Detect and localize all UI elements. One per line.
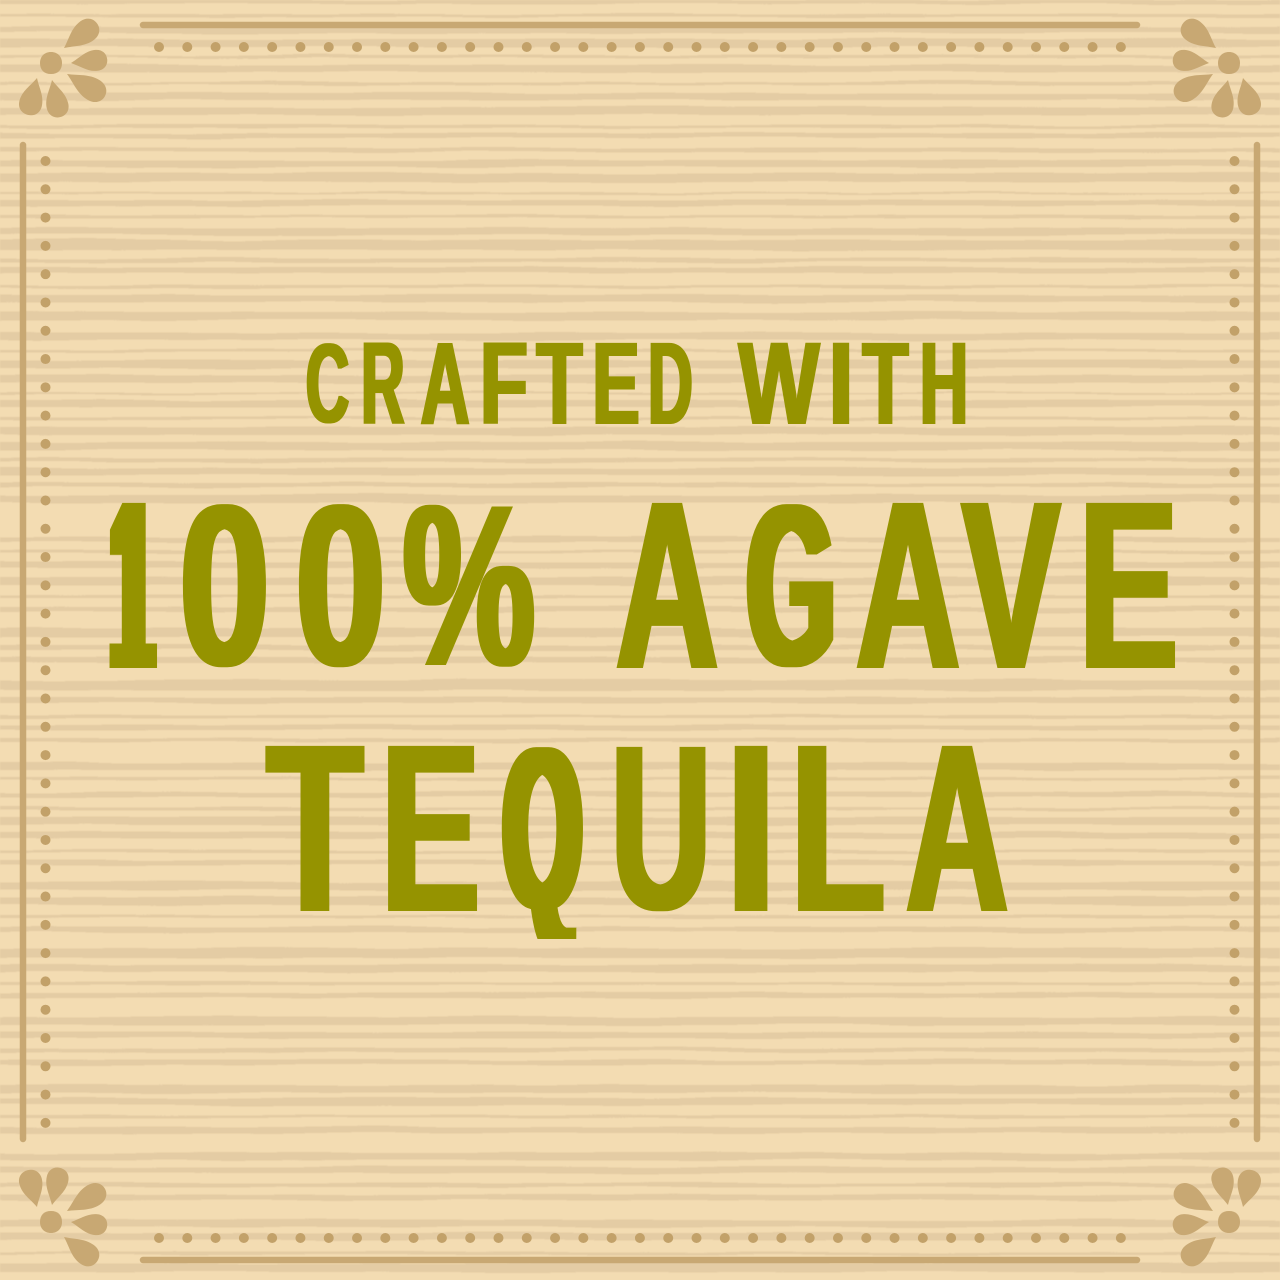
heading line: 100% AGAVE: A [856,451,960,719]
heading line: TEQUILA: T [267,695,363,963]
border: bottom bar [143,1257,1137,1263]
heading line: CRAFTED WITH: C [306,321,349,447]
heading line: TEQUILA: L [791,694,885,962]
border: bottom dotted row [159,1233,1122,1243]
border: left dotted column [40,161,50,1124]
heading line: 100% AGAVE [112,451,1178,720]
heading line: CRAFTED WITH: F [480,318,528,450]
border: left bar [20,145,26,1139]
heading line: 100% AGAVE: E [1079,452,1178,720]
heading line: CRAFTED WITH: W [738,318,820,449]
heading line: CRAFTED WITH: A [420,319,470,450]
heading line: CRAFTED WITH: T [862,317,909,449]
heading line: CRAFTED WITH: T [536,317,583,449]
heading line: TEQUILA: Q [504,699,581,957]
icon: bottom-right corner flower [1169,1166,1263,1271]
icon: top-left corner flower [17,14,111,119]
heading line: CRAFTED WITH: R [361,317,405,449]
heading line: TEQUILA [265,746,1008,939]
heading line: TEQUILA: U [611,695,711,959]
heading line: CRAFTED WITH: D [648,318,693,449]
heading line: TEQUILA: E [381,695,480,963]
heading line: CRAFTED WITH: H [920,318,968,450]
heading line: 100% AGAVE: V [962,452,1060,720]
heading line: 100% AGAVE: A [616,451,718,719]
heading line: 100% AGAVE: 0 [296,458,386,715]
heading line: TEQUILA: A [906,694,1008,962]
border: right dotted column [1230,161,1240,1124]
border: top bar [143,22,1137,28]
heading line: TEQUILA: I [725,695,777,963]
border: right bar [1254,145,1260,1139]
heading line: CRAFTED WITH: I [828,318,854,450]
heading line: 100% AGAVE: G [747,458,835,714]
heading line: CRAFTED WITH: E [592,317,640,449]
heading line: 100% AGAVE: 0 [180,458,270,715]
icon: top-right corner flower [1169,14,1263,119]
heading line: 100% AGAVE: 1 [112,451,152,719]
heading line: 100% AGAVE: % [403,457,535,715]
heading line: CRAFTED WITH [306,317,968,450]
border: top dotted row [159,42,1122,52]
icon: bottom-left corner flower [17,1166,111,1271]
